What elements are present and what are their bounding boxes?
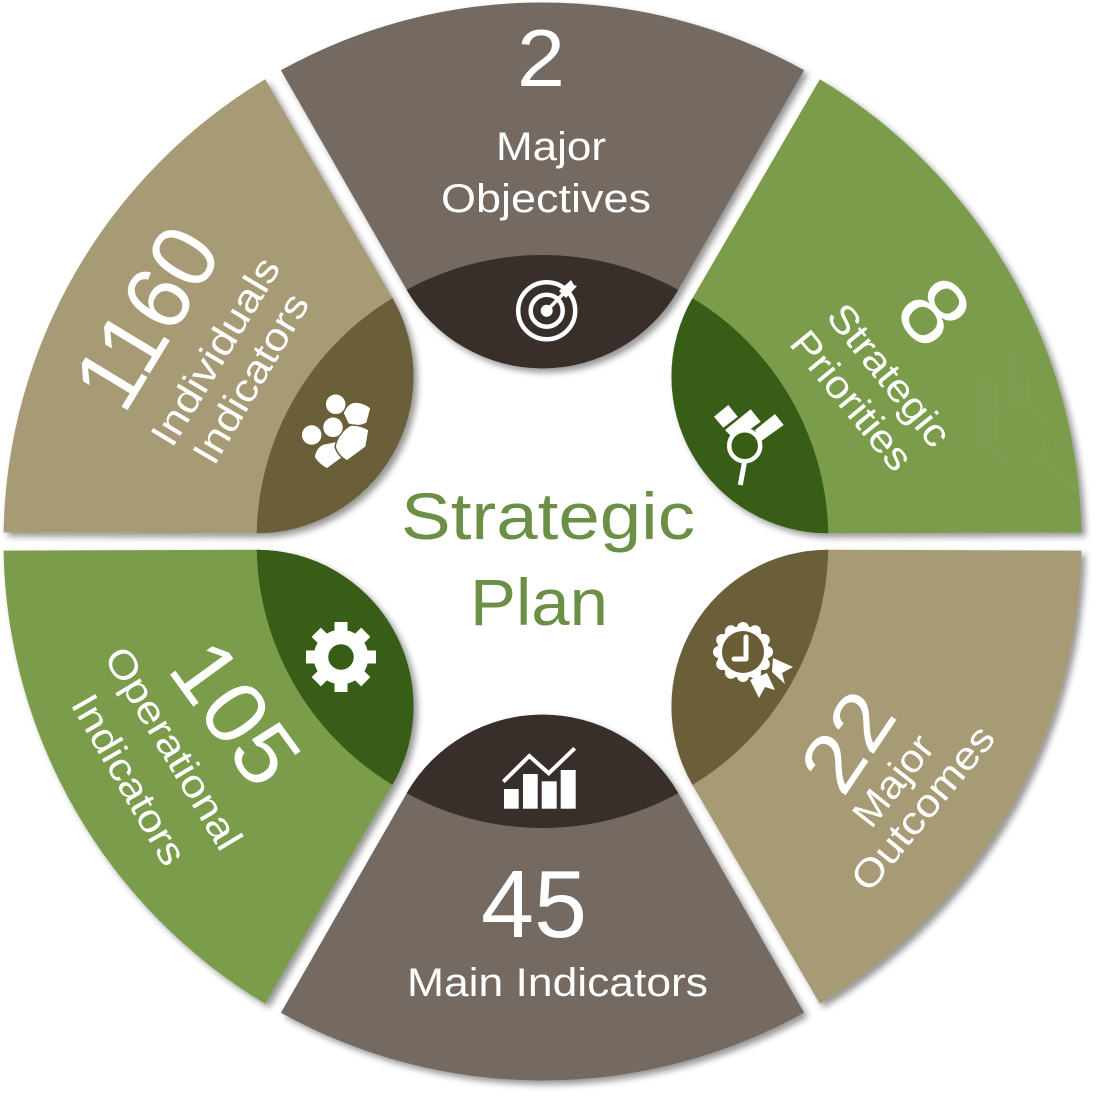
- label: individuals indicators: Indicators: [185, 286, 318, 472]
- number: 45: 45: [481, 851, 587, 958]
- icon: bars and magnifier: [714, 405, 784, 485]
- label: operational indicators: Indicators: [62, 687, 194, 873]
- number: 2: 2: [517, 14, 565, 104]
- icon: award clock: [713, 622, 793, 698]
- label: strategic priorities: Strategic: [818, 296, 959, 456]
- label: strategic priorities: [781, 296, 959, 480]
- number: 22: 22: [782, 675, 914, 809]
- panel: strategic priorities: [562, 45, 1096, 681]
- label: main indicators: Main Indicators: [407, 961, 708, 1005]
- panel: operational indicators: [0, 402, 523, 1038]
- panel: major outcomes: [562, 402, 1096, 1038]
- label: individuals indicators: [143, 250, 318, 472]
- panel: main indicators: [281, 715, 804, 1081]
- icon: gear: [306, 622, 376, 692]
- number: 105: 105: [151, 622, 321, 804]
- icon: growth chart: [503, 748, 576, 809]
- title: strategic plan: [401, 479, 695, 639]
- label: strategic priorities: Priorities: [781, 322, 921, 480]
- panel: individuals indicators: [0, 45, 523, 681]
- icon: people group: [301, 394, 371, 469]
- number: 8: 8: [876, 257, 992, 367]
- label: major objectives: [441, 125, 651, 221]
- label: individuals indicators: Individuals: [143, 250, 289, 454]
- label: operational indicators: [62, 639, 250, 873]
- label: operational indicators: Operational: [95, 639, 250, 858]
- title: strategic plan: Strategic: [401, 479, 695, 553]
- icon: faint watermark: [972, 348, 1078, 490]
- title: strategic plan: Plan: [470, 565, 608, 639]
- number: 1160: 1160: [54, 209, 241, 426]
- label: major outcomes: Outcomes: [843, 717, 1004, 900]
- label: major objectives: Major: [496, 125, 606, 169]
- label: major outcomes: Major: [844, 727, 943, 836]
- panel: major objectives: [281, 2, 804, 368]
- label: major objectives: Objectives: [441, 177, 651, 221]
- icon: target: [518, 280, 577, 339]
